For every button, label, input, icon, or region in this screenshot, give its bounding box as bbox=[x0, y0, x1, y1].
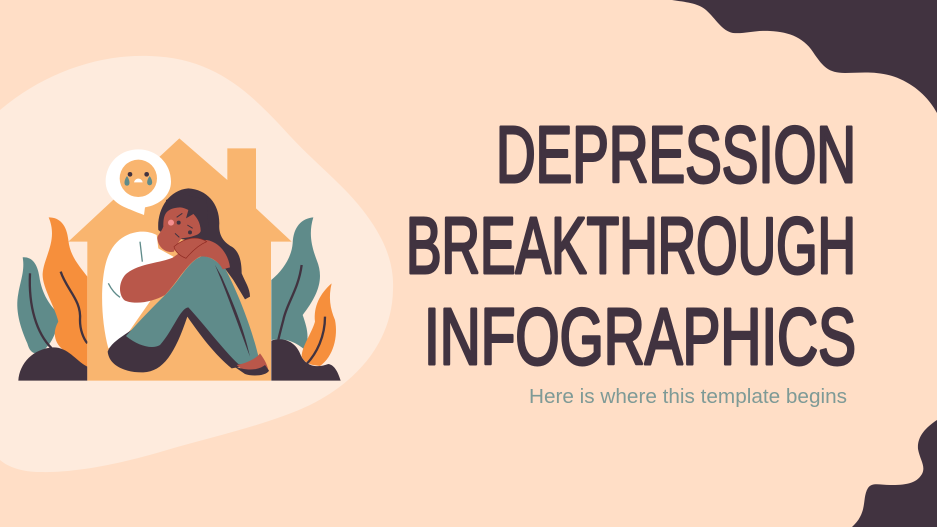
subtitle: Here is where this template begins bbox=[529, 386, 847, 408]
corner shape: top right bbox=[672, 0, 937, 113]
house bbox=[68, 138, 292, 381]
leaves: right group bbox=[271, 217, 341, 381]
speech bubble with crying face bbox=[106, 149, 171, 215]
title bbox=[406, 110, 856, 381]
girl sitting bbox=[102, 188, 269, 376]
leaves: left group bbox=[17, 217, 87, 381]
blob: pale backdrop bbox=[0, 56, 393, 472]
illustration: sad girl in house bbox=[17, 138, 341, 381]
corner shape: bottom right bbox=[852, 420, 937, 527]
